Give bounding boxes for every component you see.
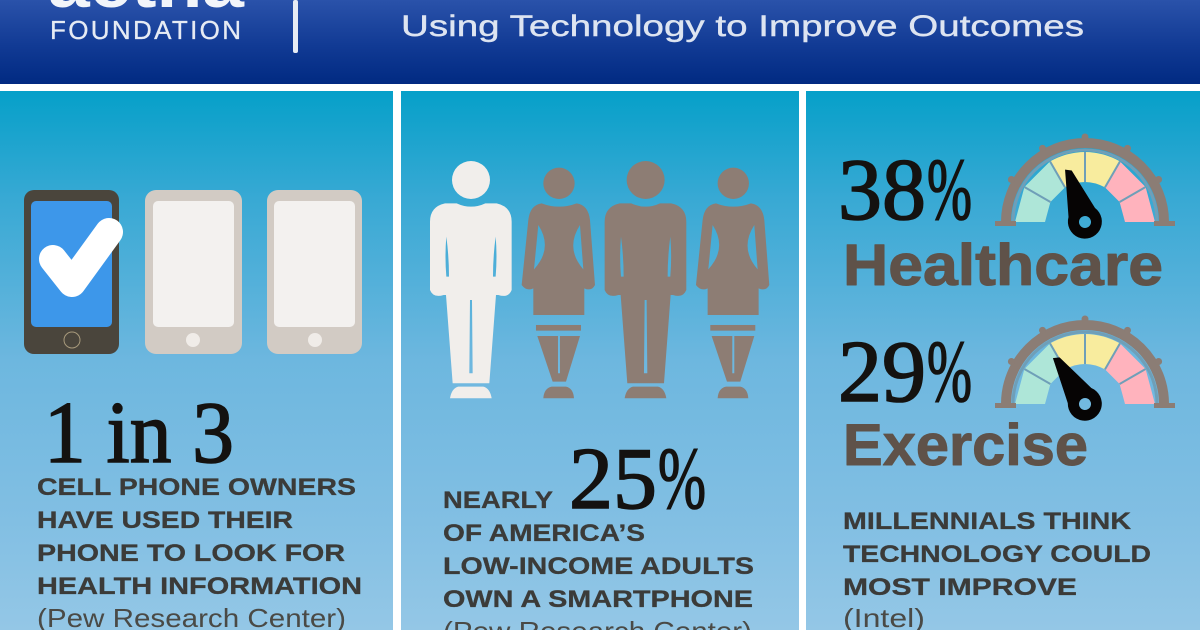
logo: Aetna Foundation: [48, 0, 245, 45]
statistic: 1 in 3: 1 in 3: [44, 385, 234, 482]
text block: millennials description: TECHNOLOGY COULD: [843, 541, 1151, 568]
icon: man: [605, 161, 686, 398]
icon: woman: [696, 168, 769, 398]
statistic: 29%: 29: [838, 324, 926, 421]
text block: phone statistic description: PHONE TO LOOK FOR: [37, 540, 345, 567]
statistic: nearly 25%: 25: [569, 431, 657, 528]
label: Exercise: Exercise: [843, 413, 1088, 478]
icon: blank phone: [145, 190, 242, 354]
gauge needle: [1051, 164, 1106, 243]
gauge: exercise: [995, 316, 1175, 427]
text block: phone statistic description: HAVE USED THEIR: [37, 507, 293, 534]
statistic: 38%: 38: [838, 142, 926, 239]
icon: phone with check mark: [24, 190, 119, 354]
icon: blank phone: [267, 190, 362, 354]
statistic: 38%: %: [927, 142, 972, 239]
text block: phone statistic description: CELL PHONE OWNERS: [37, 474, 356, 501]
statistic: nearly 25%: NEARLY: [443, 487, 553, 514]
header banner: [0, 0, 1200, 84]
header subtitle: Using Technology to Improve Outcomes: [401, 10, 1084, 43]
label: Healthcare: Healthcare: [843, 233, 1163, 298]
text block: phone statistic description: [37, 474, 362, 630]
statistic: nearly 25%: [443, 431, 706, 528]
text block: ownership description: OWN A SMARTPHONE: [443, 586, 753, 613]
text block: ownership description: [443, 520, 754, 630]
text block: millennials description: MOST IMPROVE: [843, 574, 1077, 601]
text block: millennials description: MILLENNIALS THINK: [843, 508, 1132, 535]
panel: smartphone health lookups: [0, 91, 393, 630]
gauge: healthcare: [995, 134, 1175, 243]
text block: millennials description: [843, 508, 1151, 630]
icon: highlighted man: [430, 161, 512, 398]
text block: ownership description: OF AMERICA’S: [443, 520, 645, 547]
statistic: 29%: %: [927, 324, 972, 421]
text block: ownership description: LOW-INCOME ADULTS: [443, 553, 754, 580]
gauge needle: [1040, 348, 1108, 427]
panel: low-income smartphone ownership: [401, 91, 799, 630]
statistic: 38%: [838, 142, 972, 239]
pictogram: one in four people highlighted: [430, 161, 769, 398]
statistic: 29%: [838, 324, 972, 421]
panel: millennials on technology: [806, 91, 1200, 630]
icon: woman: [522, 168, 595, 398]
logo: Aetna Foundation: FOUNDATION: [50, 15, 241, 45]
text block: phone statistic description: HEALTH INFORMATION: [37, 573, 362, 600]
statistic: nearly 25%: %: [658, 431, 706, 528]
